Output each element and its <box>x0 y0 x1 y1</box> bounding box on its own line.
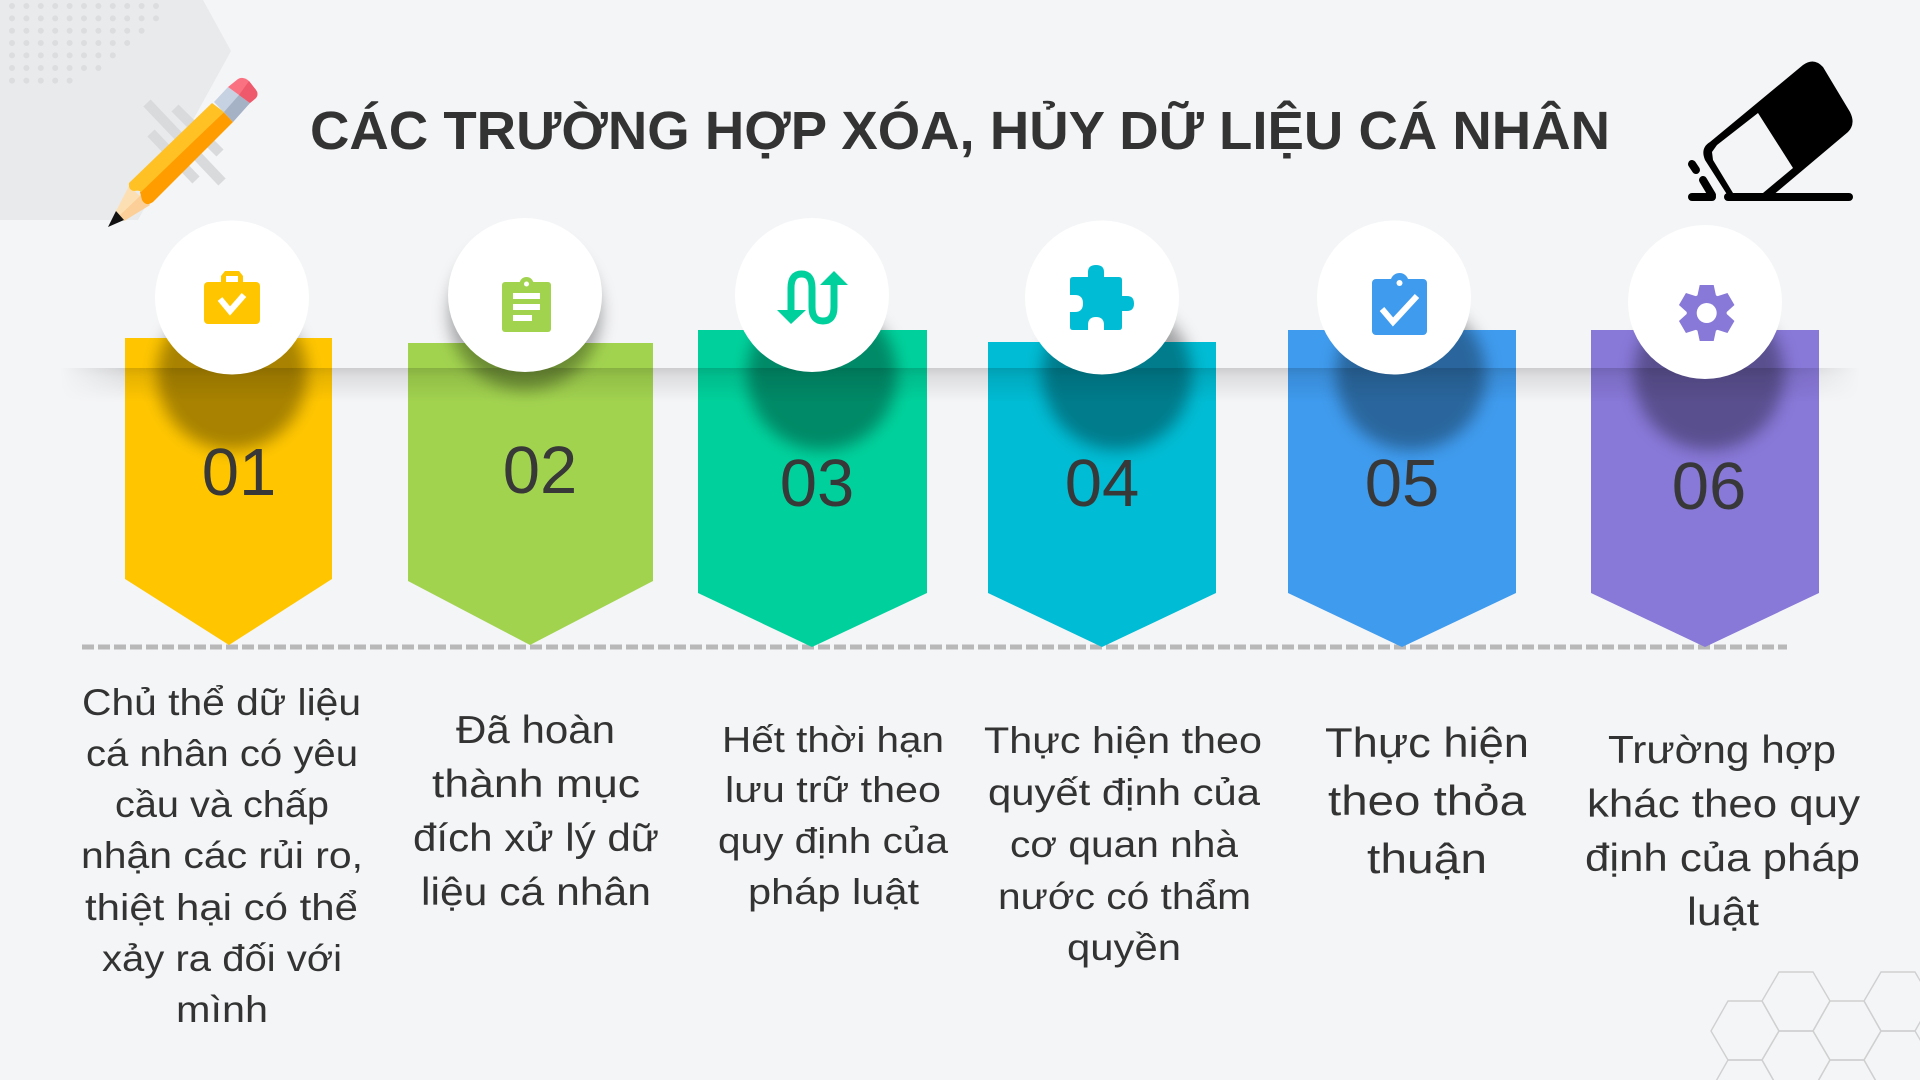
background hexagon <box>0 0 231 220</box>
pennant 01 <box>125 338 332 645</box>
text block 04 <box>984 720 1262 968</box>
text block 04: quyền <box>1067 927 1181 968</box>
pennant 02 <box>408 343 653 645</box>
number 06: 06 <box>1672 449 1746 524</box>
hexagon outline pattern <box>1711 972 1920 1080</box>
text block 04: Thực hiện theo <box>984 720 1262 761</box>
text block 05: theo thỏa <box>1328 777 1527 824</box>
text block 04: quyết định của <box>988 772 1260 813</box>
circle shadows <box>157 238 1784 450</box>
text block 03: quy định của <box>718 820 949 861</box>
circle 03 with arrows icon <box>735 218 889 372</box>
text block 06: luật <box>1687 891 1759 934</box>
text block 05: thuận <box>1367 835 1487 882</box>
text block 03 <box>718 719 949 912</box>
text block 01 <box>81 682 363 1030</box>
text block 01: thiệt hại có thể <box>85 887 358 928</box>
text block 02: thành mục <box>432 763 640 806</box>
text block 06: Trường hợp <box>1608 729 1836 772</box>
text block 04: cơ quan nhà <box>1010 824 1238 865</box>
circle 06 with gear icon <box>1628 225 1782 379</box>
text block 03: Hết thời hạn <box>722 719 944 760</box>
icon: pencil <box>108 78 258 227</box>
title: CÁC TRƯỜNG HỢP XÓA, HỦY DỮ LIỆU CÁ NHÂN <box>310 100 1610 161</box>
number 02: 02 <box>503 433 577 508</box>
circle 05 with checklist icon <box>1317 220 1471 374</box>
number 03: 03 <box>780 446 854 521</box>
circle 04 with puzzle icon <box>1025 220 1179 374</box>
text block 06: khác theo quy <box>1587 783 1861 826</box>
number 01: 01 <box>202 435 276 510</box>
text block 02 <box>413 709 659 914</box>
text block 03: lưu trữ theo <box>725 769 941 810</box>
circle 01 with briefcase icon <box>155 220 309 374</box>
text block 02: Đã hoàn <box>456 709 615 752</box>
number 05: 05 <box>1365 446 1439 521</box>
circle 02 with clipboard icon <box>448 218 602 372</box>
text block 05: Thực hiện <box>1325 719 1529 766</box>
text block 04: nước có thẩm <box>998 876 1251 917</box>
text block 01: xảy ra đối với <box>102 938 342 979</box>
text block 01: cầu và chấp <box>115 784 329 825</box>
text block 01: mình <box>176 989 268 1030</box>
number 04: 04 <box>1065 446 1139 521</box>
pennant 03 <box>698 330 927 647</box>
dot pattern <box>12 6 157 81</box>
text block 01: nhận các rủi ro, <box>81 835 363 876</box>
text block 01: Chủ thể dữ liệu <box>82 682 361 723</box>
text block 05 <box>1325 719 1529 882</box>
icon: eraser <box>1692 61 1853 197</box>
horizontal shadow band <box>76 368 1844 392</box>
dashed baseline <box>82 644 1787 650</box>
pennant 05 <box>1288 330 1516 647</box>
text block 06: định của pháp <box>1585 837 1860 880</box>
text block 02: đích xử lý dữ <box>413 817 659 860</box>
pennant 04 <box>988 342 1216 647</box>
pennant 06 <box>1591 330 1819 647</box>
text block 03: pháp luật <box>748 871 919 912</box>
text block 01: cá nhân có yêu <box>86 733 358 774</box>
text block 02: liệu cá nhân <box>421 871 651 914</box>
text block 06 <box>1585 729 1861 934</box>
